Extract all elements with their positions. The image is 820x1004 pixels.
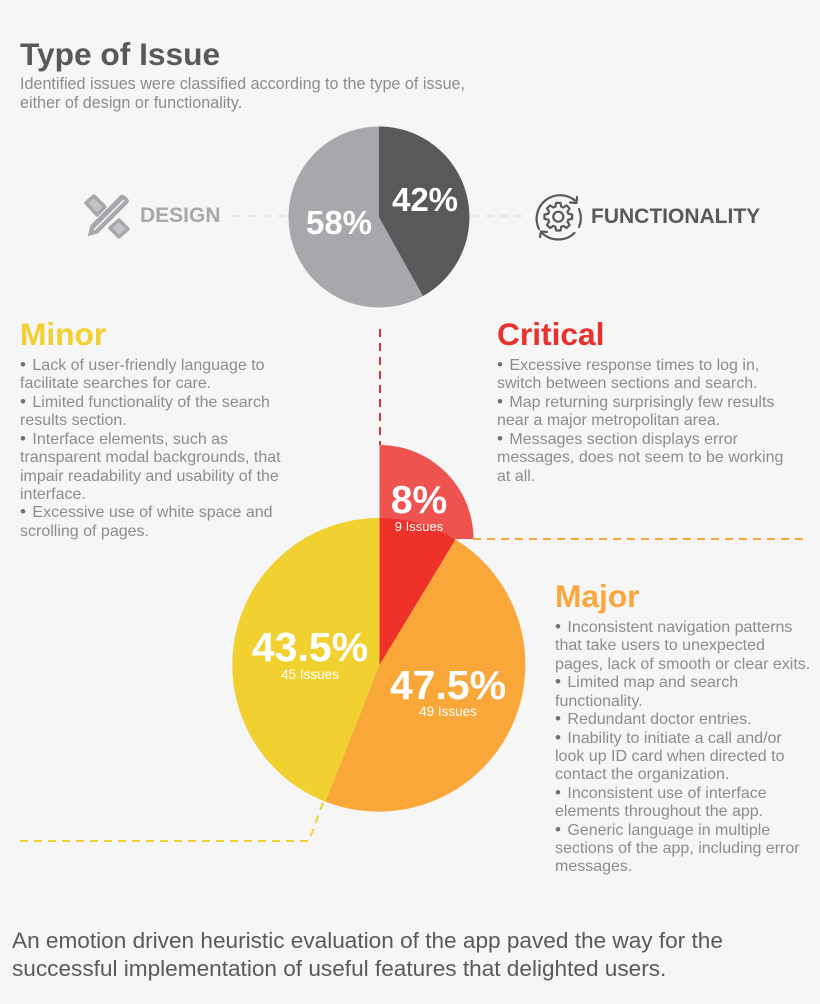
text: minor issues: • Limited functionality of the search	[20, 392, 270, 411]
connector: design dashed line	[232, 215, 290, 217]
text: minor issues: results section.	[20, 412, 127, 429]
icon: pencil and ruler	[86, 194, 130, 237]
icon: gear with cycle arrows	[537, 195, 581, 240]
connector: functionality dashed line	[470, 215, 526, 217]
text: critical issues: messages, does not seem to be working	[497, 449, 783, 466]
closing statement: successful implementation of useful features that delighted users.	[12, 956, 666, 980]
title: Type of Issue	[20, 36, 220, 72]
text: major issues: contact the organization.	[555, 766, 729, 783]
heading: critical: Critical	[497, 316, 604, 352]
pie chart: type of issue: 42%	[392, 181, 458, 218]
text: critical issues	[497, 355, 783, 485]
intro text: either of design or functionality.	[20, 94, 242, 112]
pie chart: type of issue	[288, 126, 470, 308]
text: critical issues: • Excessive response times to log in,	[497, 355, 759, 374]
connector: major dashed line	[473, 538, 804, 540]
text: major issues: pages, lack of smooth or clear exits.	[555, 656, 810, 673]
pie chart: severity of issues: 49 Issues	[419, 704, 477, 719]
text: minor issues: interface.	[20, 486, 86, 503]
text: major issues: • Inconsistent use of interface	[555, 783, 767, 802]
text: major issues: • Inability to initiate a call and/or	[555, 728, 782, 747]
text: major issues: sections of the app, including error	[555, 840, 800, 857]
intro text: Identified issues were classified according to the type of issue,	[20, 75, 465, 93]
text: minor issues: transparent modal backgrounds, that	[20, 449, 281, 466]
heading: minor: Minor	[20, 316, 106, 352]
text: minor issues: impair readability and usability of the	[20, 468, 279, 485]
text: critical issues: • Map returning surprisingly few results	[497, 392, 774, 411]
pie chart: severity of issues	[232, 445, 525, 812]
text: major issues: • Redundant doctor entries.	[555, 709, 752, 728]
pie chart: type of issue: 58%	[306, 204, 372, 241]
text: minor issues: • Lack of user-friendly language to	[20, 355, 265, 374]
heading: major: Major	[555, 578, 640, 614]
text: major issues: • Generic language in multiple	[555, 820, 770, 839]
intro text	[20, 75, 465, 112]
text: minor issues: • Excessive use of white space and	[20, 502, 273, 521]
pie chart: severity of issues: 45 Issues	[281, 667, 339, 682]
text: major issues: • Limited map and search	[555, 672, 738, 691]
label: design: DESIGN	[140, 204, 221, 227]
pie chart: severity of issues: 47.5%	[390, 662, 506, 708]
pie chart: severity of issues: 9 Issues	[395, 519, 444, 534]
text: major issues: • Inconsistent navigation patterns	[555, 617, 792, 636]
connector: minor dashed line	[20, 800, 324, 841]
text: critical issues: switch between sections and search.	[497, 375, 758, 392]
connector: critical dashed line	[379, 329, 381, 445]
text: major issues: elements throughout the app.	[555, 803, 763, 820]
text: critical issues: near a major metropolitan area.	[497, 412, 720, 429]
text: major issues	[555, 617, 810, 875]
text: critical issues: • Messages section displays error	[497, 429, 738, 448]
text: minor issues: facilitate searches for care.	[20, 375, 211, 392]
closing statement: An emotion driven heuristic evaluation of the app paved the way for the	[12, 928, 723, 953]
text: major issues: messages.	[555, 858, 632, 875]
text: minor issues	[20, 355, 281, 540]
text: minor issues: scrolling of pages.	[20, 523, 149, 540]
text: critical issues: at all.	[497, 468, 535, 485]
text: minor issues: • Interface elements, such as	[20, 429, 228, 448]
text: major issues: functionality.	[555, 693, 643, 710]
text: major issues: look up ID card when directed to	[555, 748, 784, 765]
pie chart: severity of issues: 43.5%	[252, 624, 368, 670]
closing statement	[12, 928, 723, 980]
text: major issues: that take users to unexpected	[555, 637, 765, 654]
label: functionality: FUNCTIONALITY	[591, 205, 760, 228]
pie chart: severity of issues: 8%	[391, 479, 447, 522]
